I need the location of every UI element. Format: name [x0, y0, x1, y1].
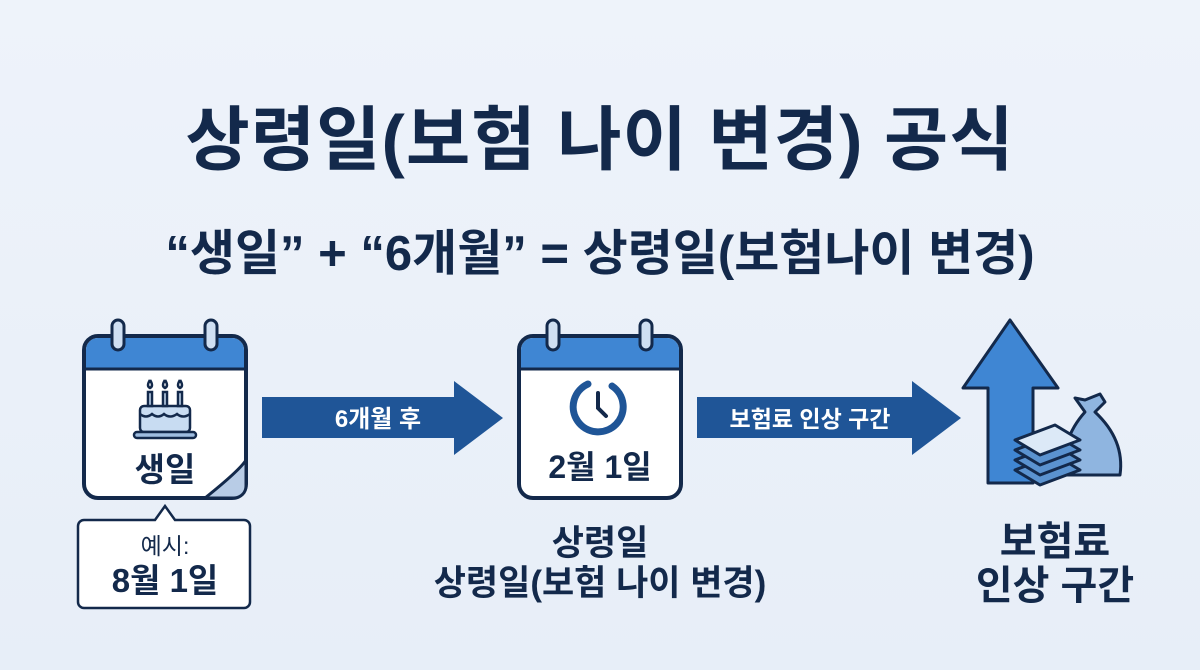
- label: 상령일: 상령일(보험 나이 변경): [434, 564, 766, 603]
- arrow: 6 months later: [262, 381, 503, 455]
- arrow: premium increase: [697, 381, 961, 455]
- label: 상령일: [434, 524, 766, 603]
- callout: example date: 8월 1일: [112, 562, 218, 599]
- calendar: birthday: 생일: [135, 451, 195, 488]
- label: premium increase period: 보험료: [1000, 520, 1110, 564]
- icon: cake: [134, 380, 196, 438]
- calendar: birthday: [84, 320, 246, 498]
- calendar: 상령일: [519, 320, 681, 498]
- calendar: 상령일: 2월 1일: [548, 449, 652, 485]
- formula subtitle: “생일” + “6개월” = 상령일(보험나이 변경): [165, 227, 1035, 281]
- label: 상령일: 상령일: [552, 524, 648, 563]
- icon: up arrow with money: [963, 320, 1121, 485]
- arrow: premium increase: 보험료 인상 구간: [730, 406, 890, 432]
- arrow: 6 months later: 6개월 후: [335, 406, 421, 433]
- label: premium increase period: 인상 구간: [976, 564, 1134, 608]
- callout: example date: 예시:: [141, 533, 189, 559]
- label: premium increase period: [976, 520, 1134, 608]
- callout: example date: [78, 506, 250, 608]
- title: 상령일(보험 나이 변경) 공식: [185, 101, 1015, 179]
- icon: clock: [573, 384, 623, 432]
